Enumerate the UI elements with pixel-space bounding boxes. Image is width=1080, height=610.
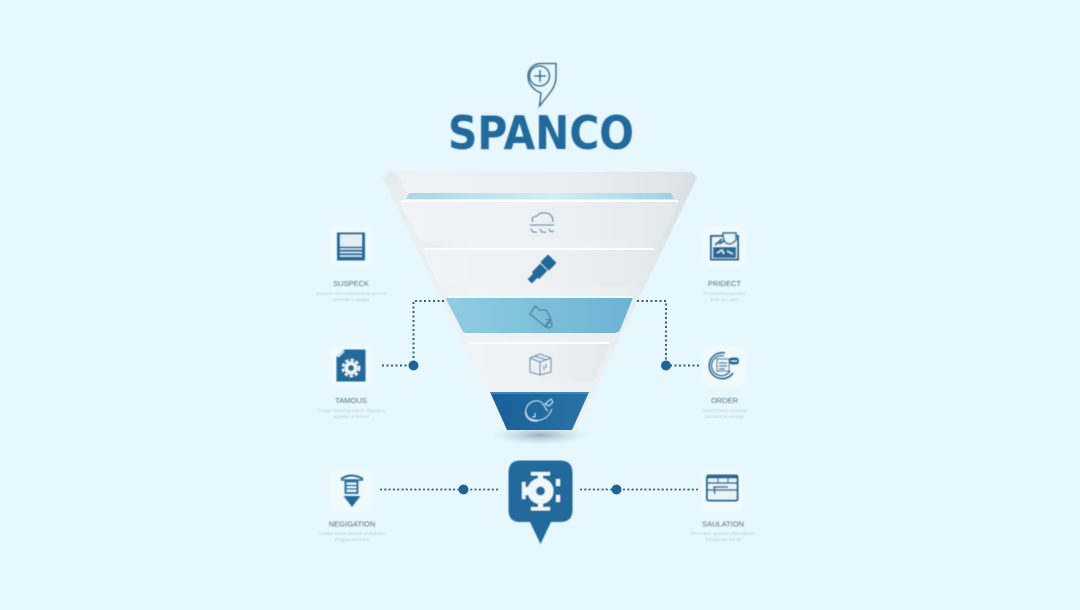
label: ORDER [711, 396, 739, 405]
connector: funnel to Order [637, 301, 699, 370]
icon: marker pen [525, 254, 557, 286]
funnel band 3 [446, 296, 634, 333]
description: agnette ot lomee [333, 414, 369, 420]
label: NEGIGATION [329, 520, 375, 528]
description: Nwarcnoeric bsaorat [702, 408, 747, 414]
icon: document lines [337, 232, 365, 260]
description [702, 408, 747, 420]
label: SUSPECK [333, 279, 369, 288]
funnel rim [397, 172, 683, 196]
icon: cloud over waves [530, 213, 554, 232]
title: SPANCO [448, 106, 634, 160]
connector: Negigation to hub [380, 484, 500, 494]
description [704, 291, 745, 303]
icon tile [330, 345, 372, 387]
description: Preceversacponied [704, 291, 745, 297]
icon: drill bit [341, 476, 363, 507]
description [316, 291, 387, 303]
label: SAULATION [702, 520, 744, 528]
item: Negigation [319, 470, 386, 543]
icon: swirl [526, 399, 553, 421]
description: Sovighcen fan fe [705, 537, 741, 543]
funnel liquid band [406, 193, 674, 199]
description: Create twists wordet arebdrans [319, 531, 386, 537]
icon tile [330, 225, 372, 267]
description [691, 531, 756, 543]
icon: valve glyph [522, 472, 560, 510]
connector: funnel to Tamous [382, 301, 444, 370]
icon tile [330, 470, 372, 512]
icon tile [703, 225, 745, 267]
funnel band 2 [423, 248, 655, 287]
icon: top pin with plus [528, 63, 556, 106]
funnel [383, 172, 697, 445]
description: Regnacarintrani [335, 537, 369, 543]
icon: map board [711, 233, 738, 260]
icon: cube [530, 354, 551, 375]
funnel band 5 [490, 392, 589, 430]
description: amende in pioige [333, 297, 370, 303]
item: Saulation [691, 470, 756, 543]
connector: hub to Saulation [580, 484, 698, 494]
description: Tmope fesseng uation objuntics [317, 408, 385, 414]
label: TAMOUS [335, 396, 367, 405]
icon tile [703, 345, 745, 387]
funnel band 1 [400, 200, 679, 241]
description: Suspect ent involvements procee [316, 291, 387, 297]
description: paratent is nuntige [705, 414, 745, 420]
item: Tamous [317, 345, 385, 420]
description: Promatec aparset ofterndtions [691, 531, 756, 537]
icon tile [701, 470, 743, 512]
item: Order [702, 345, 747, 420]
icon: browser window [707, 476, 738, 500]
central hub icon [508, 460, 572, 544]
funnel base shadow [492, 425, 588, 445]
description [319, 531, 386, 543]
icon: circular order [709, 353, 739, 379]
label: PRIDECT [708, 279, 741, 288]
funnel shell [383, 172, 697, 430]
icon: gear document [336, 350, 366, 382]
item: Suspeck [316, 225, 387, 303]
icon: plug outline [530, 306, 552, 328]
funnel band 4 [468, 342, 610, 382]
description: fetat ipo opiin [710, 297, 739, 303]
description [317, 408, 385, 420]
item: Pridect [703, 225, 745, 303]
